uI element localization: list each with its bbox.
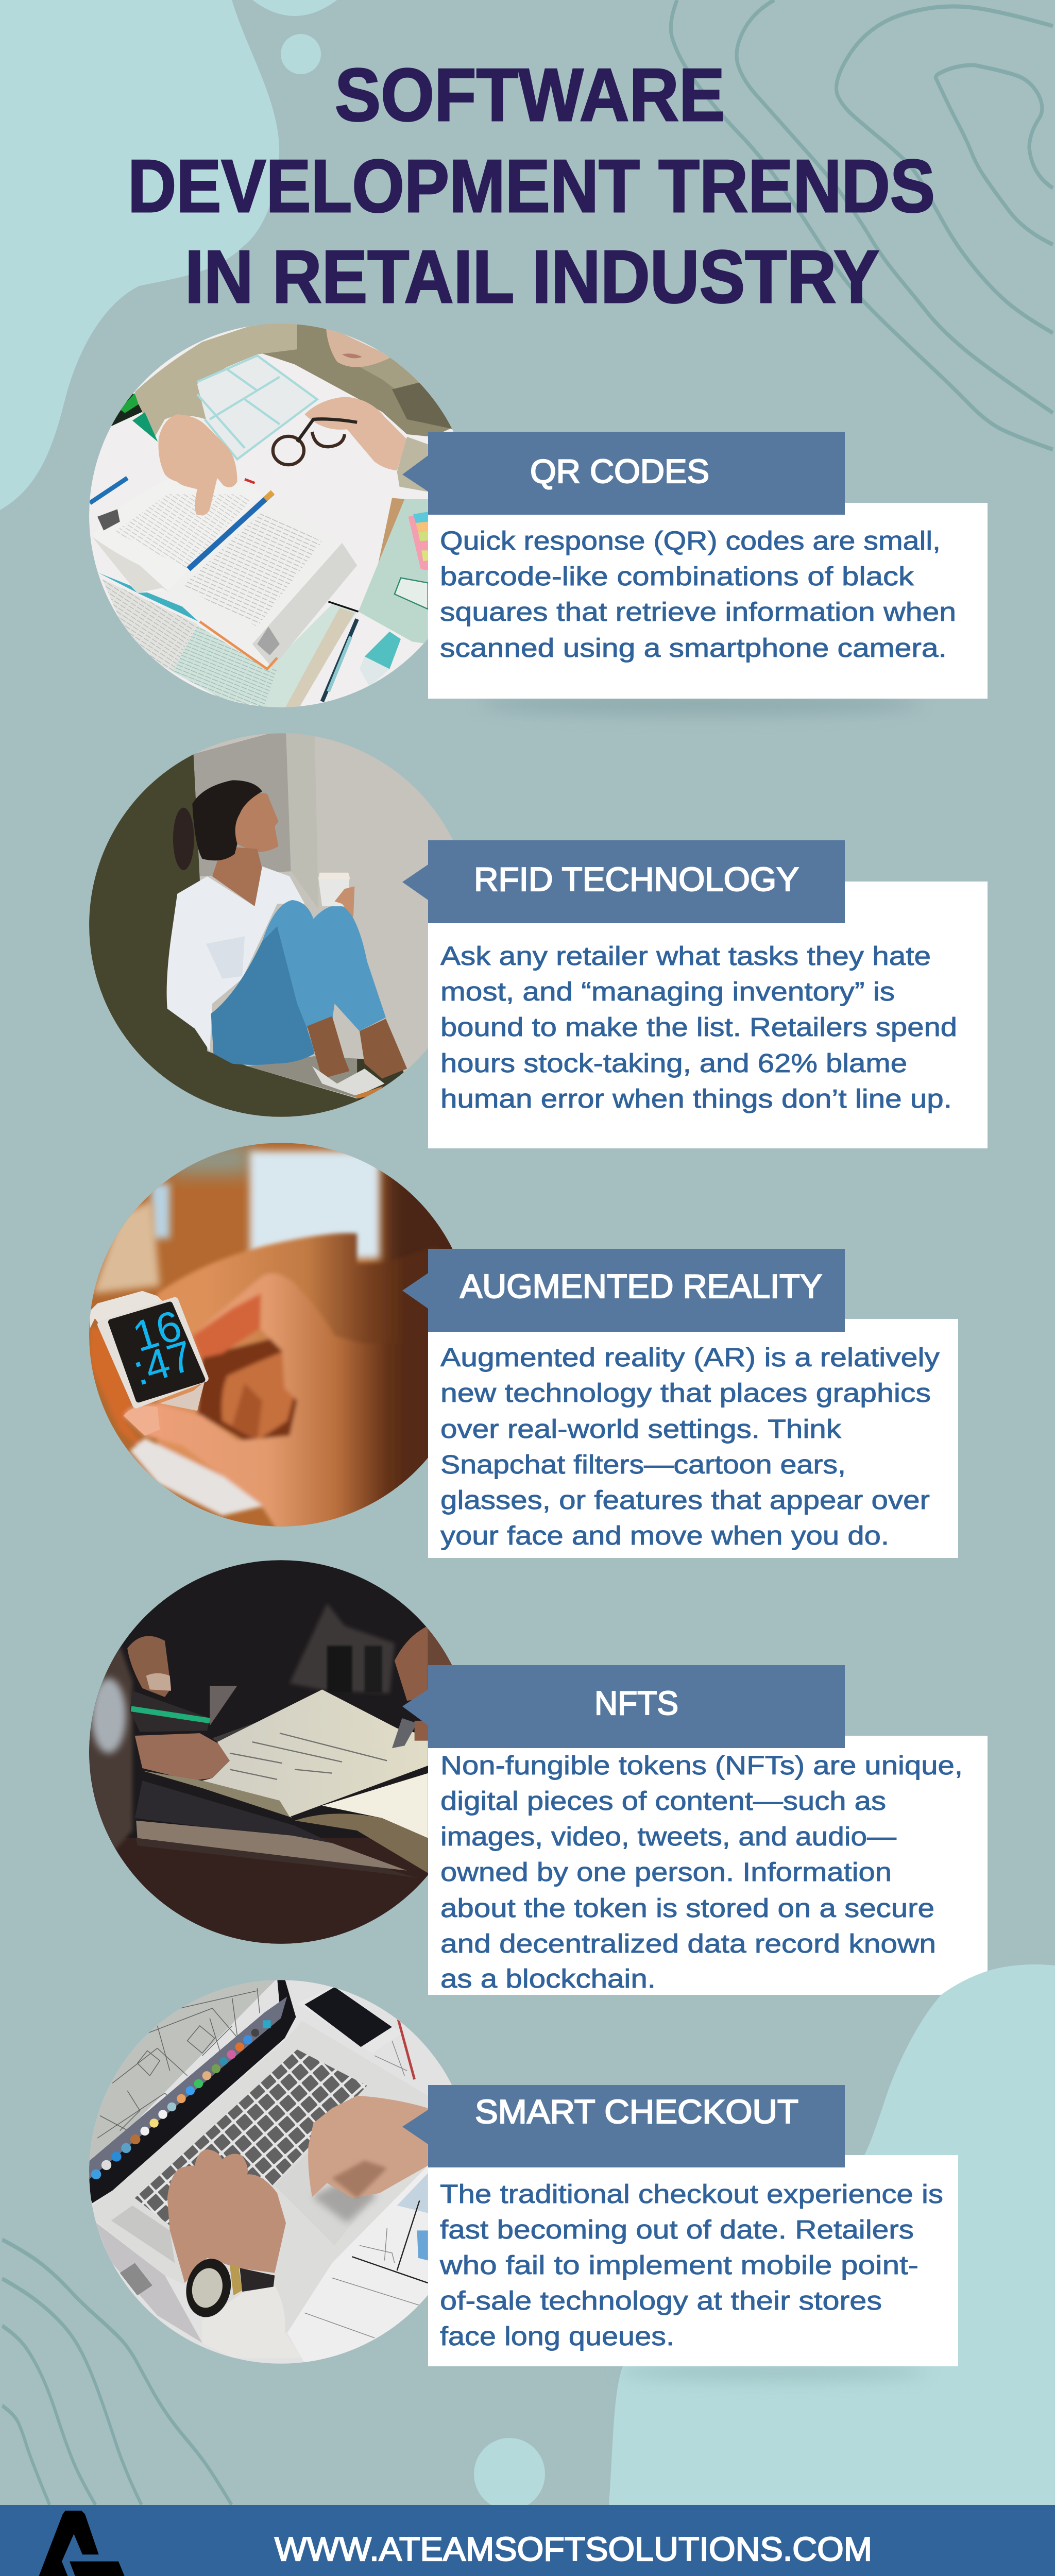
- card: augmented reality: AUGMENTED REALITY: [460, 1267, 822, 1305]
- body text: Non-fungible tokens (NFTs) are unique,: [440, 1751, 963, 1780]
- body text: fast becoming out of date. Retailers: [440, 2215, 914, 2244]
- photo: woman sitting with a coffee cup: [82, 729, 474, 1121]
- body text: images, video, tweets, and audio—: [440, 1822, 896, 1851]
- body text: and decentralized data record known: [440, 1929, 936, 1958]
- card: RFID technology: [402, 840, 988, 1148]
- photo: hands reading an open book: [82, 319, 474, 711]
- card: NFTs: NFTS: [594, 1684, 678, 1722]
- shadow: below card 5: [618, 2362, 927, 2381]
- body text: The traditional checkout experience is: [440, 2179, 943, 2209]
- body text: most, and “managing inventory” is: [440, 977, 895, 1006]
- card: NFTs: [402, 1665, 988, 1995]
- body text: barcode-like combinations of black: [440, 562, 914, 591]
- photo: hand adjusting a smartwatch: [89, 1143, 452, 1527]
- body text: bound to make the list. Retailers spend: [440, 1012, 957, 1042]
- card: augmented reality: [402, 1249, 958, 1558]
- card: smart checkout: [402, 2085, 958, 2366]
- body text: Ask any retailer what tasks they hate: [440, 941, 931, 971]
- watch time: :47: [127, 1331, 198, 1395]
- body text: who fail to implement mobile point-: [439, 2250, 918, 2280]
- icon: company logo: [32, 2511, 125, 2576]
- card: RFID technology: RFID TECHNOLOGY: [474, 860, 799, 898]
- body text: as a blockchain.: [440, 1964, 656, 1993]
- card: QR codes: QR CODES: [530, 452, 709, 490]
- body text: over real-world settings. Think: [440, 1414, 842, 1444]
- contour lines: top right: [671, 0, 1053, 449]
- title: IN RETAIL INDUSTRY: [185, 235, 879, 318]
- body text: [440, 526, 956, 663]
- shadow: below card 1: [479, 692, 922, 715]
- website: WWW.ATEAMSOFTSOLUTIONS.COM: [275, 2530, 872, 2568]
- body text: Quick response (QR) codes are small,: [440, 526, 941, 555]
- body text: scanned using a smartphone camera.: [440, 633, 947, 663]
- body text: [440, 1751, 963, 1993]
- blob: bottom right: [431, 1964, 1055, 2576]
- photo: writing in a notebook: [82, 1556, 474, 1947]
- body text: digital pieces of content—such as: [440, 1786, 886, 1816]
- dock icons: [91, 2020, 270, 2179]
- body text: owned by one person. Information: [440, 1857, 892, 1887]
- title: DEVELOPMENT TRENDS: [128, 144, 935, 228]
- watch time: [135, 1312, 186, 1385]
- body text: about the token is stored on a secure: [440, 1893, 934, 1923]
- glasses: [273, 419, 357, 465]
- body text: hours stock-taking, and 62% blame: [440, 1048, 907, 1078]
- body text: glasses, or features that appear over: [440, 1485, 930, 1515]
- body text: [440, 941, 957, 1113]
- body text: your face and move when you do.: [440, 1521, 889, 1550]
- blob: top left: [0, 0, 279, 510]
- title: SOFTWARE: [335, 53, 725, 137]
- contour lines: bottom left: [2, 2240, 289, 2576]
- body text: of-sale technology at their stores: [440, 2286, 882, 2315]
- body text: human error when things don’t line up.: [440, 1084, 952, 1113]
- footer bar: [0, 2505, 1055, 2576]
- oval: bottom: [474, 2438, 545, 2510]
- photo: hands typing on a laptop: [82, 1976, 474, 2367]
- body text: Snapchat filters—cartoon ears,: [440, 1450, 846, 1479]
- body text: [440, 1343, 940, 1550]
- oval: small top: [281, 34, 321, 74]
- card: smart checkout: SMART CHECKOUT: [475, 2093, 798, 2130]
- body text: Augmented reality (AR) is a relatively: [440, 1343, 940, 1372]
- body text: [439, 2179, 943, 2351]
- body text: squares that retrieve information when: [440, 597, 956, 626]
- card: QR codes: [402, 432, 988, 699]
- body text: face long queues.: [440, 2321, 674, 2351]
- watch time: 16: [127, 1301, 187, 1361]
- title: [128, 53, 935, 318]
- oval: top: [252, 0, 337, 16]
- body text: new technology that places graphics: [440, 1378, 931, 1408]
